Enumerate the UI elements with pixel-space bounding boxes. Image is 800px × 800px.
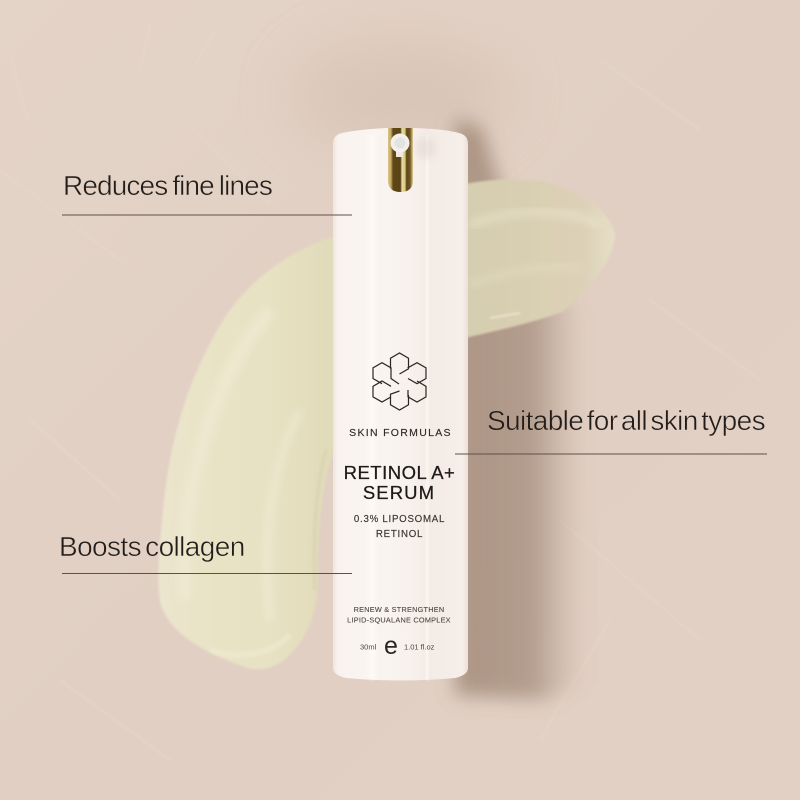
pump nozzle bbox=[390, 134, 410, 157]
callout: boosts collagen: Boosts collagen bbox=[59, 531, 245, 562]
product description: LIPID-SQUALANE COMPLEX bbox=[347, 616, 451, 624]
cream swatch: left stroke bbox=[158, 236, 336, 669]
product description: RENEW & STRENGTHEN bbox=[354, 605, 444, 614]
bottle body bbox=[333, 128, 468, 680]
product description bbox=[347, 605, 451, 624]
volume: 1.01 fl.oz bbox=[404, 642, 435, 652]
volume bbox=[360, 632, 435, 660]
volume: e bbox=[384, 632, 398, 660]
bottle cast shadow bbox=[455, 118, 590, 700]
logo: hexagon flower bbox=[373, 353, 426, 410]
volume: 30ml bbox=[360, 642, 377, 652]
concentration bbox=[354, 514, 445, 540]
concentration: 0.3% LIPOSOMAL bbox=[354, 514, 445, 525]
brand name: SKIN FORMULAS bbox=[349, 427, 452, 439]
bottle bbox=[333, 128, 468, 680]
callout: suitable for all skin types: Suitable for all skin types bbox=[487, 405, 765, 436]
product title bbox=[344, 462, 455, 503]
callout: reduces fine lines: Reduces fine lines bbox=[63, 170, 272, 201]
nozzle shadow bbox=[415, 137, 435, 159]
product title: RETINOL A+ bbox=[344, 462, 455, 483]
product title: SERUM bbox=[363, 482, 435, 503]
gold pump window bbox=[388, 128, 413, 192]
concentration: RETINOL bbox=[376, 529, 423, 540]
cream swatch: right stroke bbox=[465, 179, 615, 338]
